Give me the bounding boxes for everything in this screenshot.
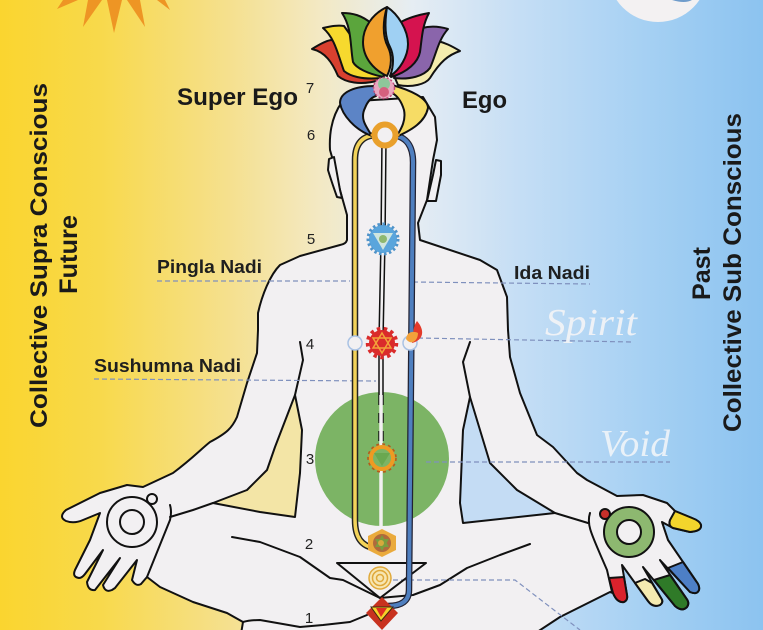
left palm circles <box>107 494 157 547</box>
petal: crimson <box>391 13 429 77</box>
petal: cream <box>395 41 460 86</box>
petal: yellow <box>323 26 381 79</box>
right ear <box>427 160 441 201</box>
chakra numbers: 2 <box>305 536 313 553</box>
label: Pingla Nadi: Pingla Nadi <box>157 257 262 277</box>
thumb: yellow <box>669 511 701 532</box>
chakra numbers <box>305 80 315 627</box>
label: Void: Void <box>600 423 671 465</box>
chakra numbers: 7 <box>306 80 314 97</box>
petal: green <box>342 13 384 77</box>
chakra numbers: 3 <box>306 451 314 468</box>
vertical label: Past: Past <box>688 246 716 300</box>
icon: moon <box>608 0 708 22</box>
dashed leader lines <box>94 281 670 630</box>
chakra 6: agnya <box>370 122 400 148</box>
chakra numbers: 5 <box>307 231 315 248</box>
void: green circle <box>315 392 449 526</box>
icon: flame <box>406 321 422 343</box>
chakra 2: swadisthana <box>368 529 396 557</box>
ring finger: cream <box>635 579 662 606</box>
icon: sun <box>57 0 170 33</box>
chakra numbers: 1 <box>305 610 313 627</box>
central channel: sushumna <box>381 140 384 560</box>
label: Ego: Ego <box>462 87 507 114</box>
vertical label: Future: Future <box>55 215 83 294</box>
chakra numbers: 6 <box>307 127 315 144</box>
label: Ida Nadi: Ida Nadi <box>514 263 590 283</box>
pingla nadi channel: yellow <box>355 135 378 548</box>
label: Sushumna Nadi: Sushumna Nadi <box>94 356 241 376</box>
little finger: red <box>609 577 627 602</box>
label: Super Ego: Super Ego <box>177 84 298 111</box>
pelvic triangle <box>337 563 426 598</box>
ida nadi channel: blue <box>388 135 413 606</box>
ego lobe: yellow <box>392 85 428 137</box>
chakra 7: sahasrara <box>374 78 394 98</box>
left ear <box>328 157 342 198</box>
vertical label: Collective Sub Conscious: Collective Sub Conscious <box>719 113 747 432</box>
petal: light blue <box>385 7 408 76</box>
index finger: blue <box>668 562 699 593</box>
super ego lobe: blue <box>340 86 376 136</box>
icon: spiral kundalini <box>369 567 391 589</box>
vertical label: Collective Supra Conscious: Collective Supra Conscious <box>26 83 53 428</box>
label: Spirit: Spirit <box>545 302 639 344</box>
right palm chakra circles <box>600 507 654 557</box>
right heart circle <box>403 336 417 350</box>
body inner contour lines <box>147 342 612 627</box>
lotus flower <box>312 7 460 86</box>
head lobes <box>340 85 428 137</box>
chakra 4: heart <box>368 328 396 358</box>
right arm gap: blue triangle <box>460 397 555 523</box>
left heart circle <box>348 336 362 350</box>
middle finger: green <box>654 575 688 609</box>
petal: orange <box>363 7 391 76</box>
petal: purple <box>394 27 448 79</box>
chakra 1: mooladhara <box>366 597 398 630</box>
petal: red <box>312 40 380 83</box>
chakra 5: vishuddhi <box>368 224 398 254</box>
chakra numbers: 4 <box>306 336 314 353</box>
chakra 3: nabhi <box>368 444 396 472</box>
seated body silhouette <box>62 97 701 630</box>
coloured finger tips <box>609 511 701 609</box>
left arm gap: yellow triangle <box>213 395 302 517</box>
